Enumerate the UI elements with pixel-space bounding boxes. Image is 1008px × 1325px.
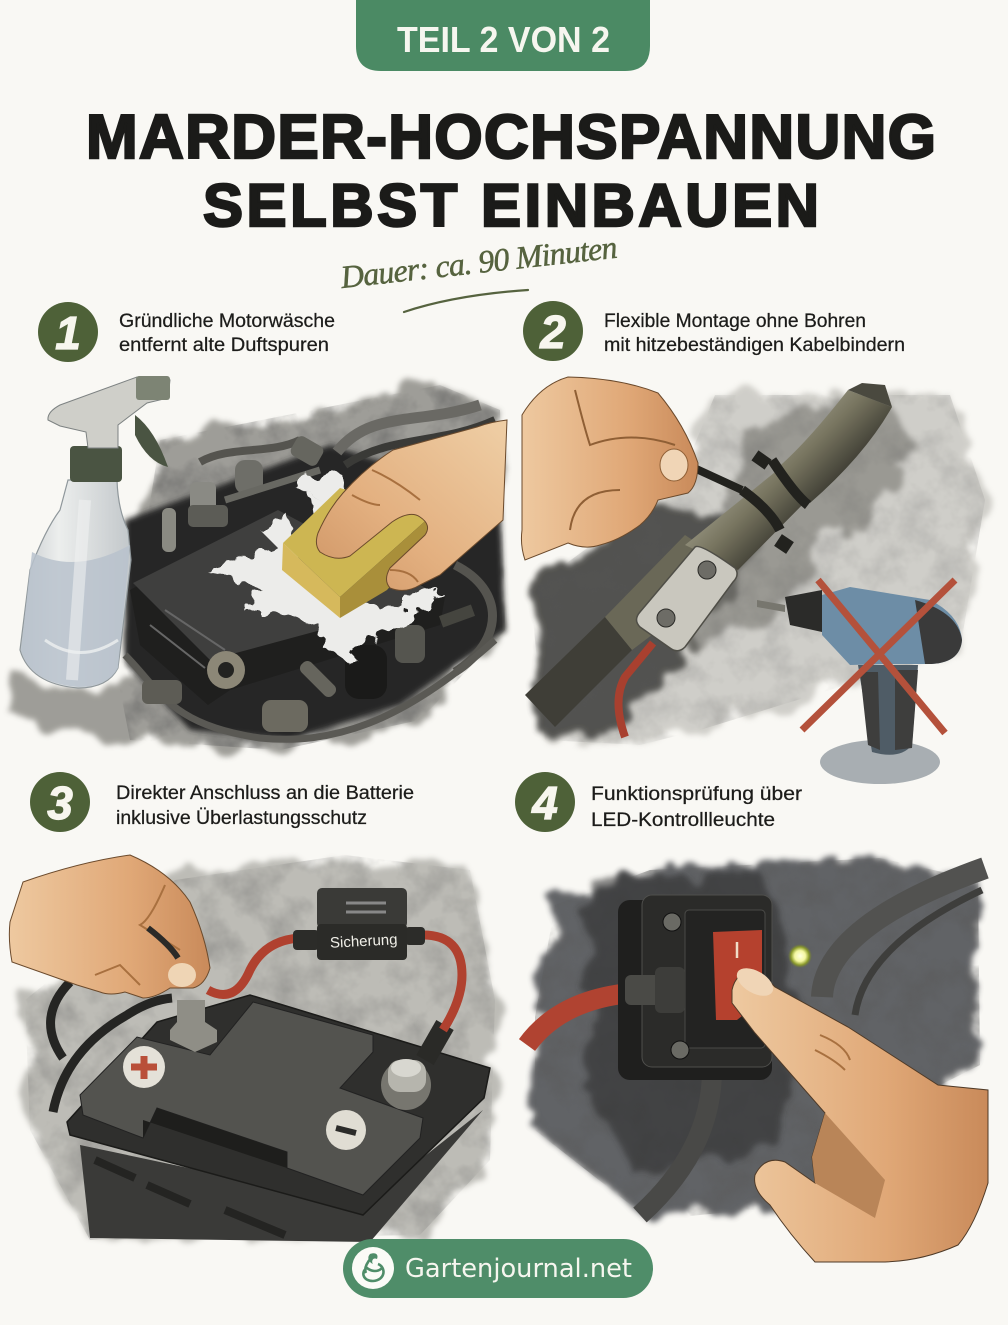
sponge xyxy=(282,488,432,618)
metal clamp xyxy=(636,546,737,651)
footer logo pill xyxy=(343,1239,653,1298)
red wire xyxy=(618,643,653,737)
red cable and fuse: Sicherung xyxy=(330,931,398,952)
red cable and fuse xyxy=(208,888,462,1030)
illustration 2: flexible mounting xyxy=(521,377,985,784)
red cable xyxy=(527,993,630,1045)
spray bottle xyxy=(20,376,170,688)
step 1 heading: Gründliche Motorwäsche xyxy=(119,311,335,332)
background wash xyxy=(530,390,985,745)
crossed out drill xyxy=(757,580,962,784)
hand on terminal xyxy=(9,855,210,998)
step 3 heading: 3 xyxy=(47,777,73,829)
switch housing xyxy=(618,895,772,1080)
step 4 heading: 4 xyxy=(531,777,558,829)
background wash xyxy=(535,858,980,1220)
background wash xyxy=(25,855,495,1240)
positive sign xyxy=(123,1046,165,1088)
hand on sponge xyxy=(316,420,507,590)
icon: garden logo xyxy=(352,1247,394,1289)
step 1 heading: entfernt alte Duftspuren xyxy=(119,335,329,356)
terminals xyxy=(170,1000,445,1110)
illustration 3: battery connection xyxy=(9,855,495,1242)
hand with cable tie xyxy=(521,377,698,560)
subtitle: duration: Dauer: ca. 90 Minuten xyxy=(338,229,619,295)
step 4 heading: Funktionsprüfung über xyxy=(591,784,803,805)
badge: part indicator: TEIL 2 VON 2 xyxy=(397,19,610,60)
battery body xyxy=(67,995,490,1242)
black cables xyxy=(51,982,172,1112)
hoses xyxy=(640,868,985,1215)
red rocker button xyxy=(713,930,762,1020)
hand pressing button xyxy=(732,962,988,1262)
title xyxy=(86,103,936,239)
title: MARDER-HOCHSPANNUNG xyxy=(86,103,936,172)
hoses xyxy=(125,405,495,739)
step 2 heading: mit hitzebeständigen Kabelbindern xyxy=(604,335,905,356)
LED light xyxy=(788,944,812,968)
step 2 heading: Flexible Montage ohne Bohren xyxy=(604,311,866,332)
title: SELBST EINBAUEN xyxy=(203,172,819,239)
engine bay wash xyxy=(15,385,505,750)
cable conduit xyxy=(525,383,892,727)
valve cover xyxy=(130,510,445,705)
step 3 heading: inklusive Überlastungsschutz xyxy=(116,808,367,829)
step 2 heading: 2 xyxy=(539,306,566,358)
badge: part indicator xyxy=(356,0,650,71)
step 1 heading xyxy=(38,302,335,362)
step 2 heading xyxy=(523,301,905,361)
illustration 1: engine wash xyxy=(15,376,507,750)
step 1 heading: 1 xyxy=(55,307,81,359)
soap foam xyxy=(205,473,440,660)
cable ties xyxy=(692,455,808,548)
step 3 heading: Direkter Anschluss an die Batterie xyxy=(116,783,414,804)
step 4 heading xyxy=(515,772,803,832)
footer logo pill: Gartenjournal.net xyxy=(405,1254,632,1284)
step 3 heading xyxy=(30,772,414,832)
step 4 heading: LED-Kontrollleuchte xyxy=(591,810,775,831)
illustration 4: function test xyxy=(527,858,988,1262)
engine fittings xyxy=(142,434,475,732)
negative sign xyxy=(326,1110,366,1150)
